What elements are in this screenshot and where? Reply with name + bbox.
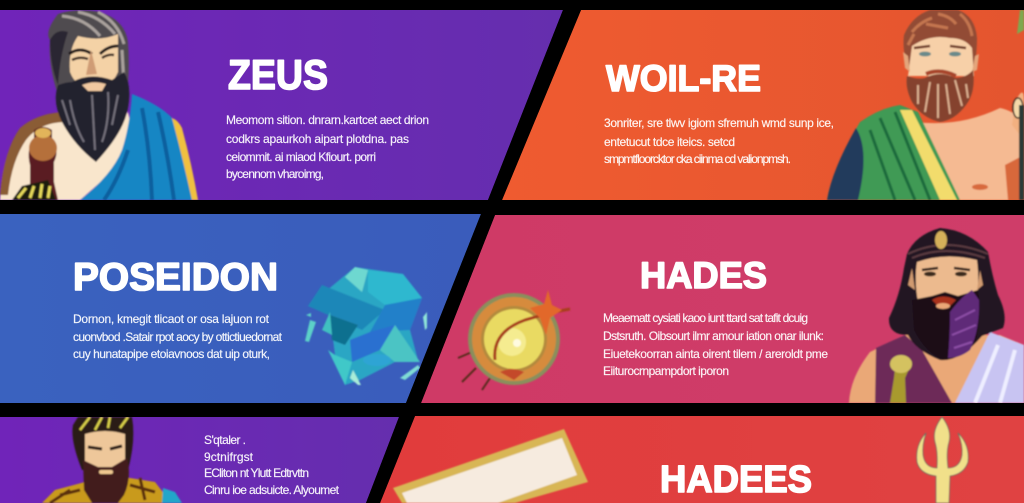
figure: Zeus: [0, 10, 198, 200]
heading: POSEIDON: POSEIDON: [73, 256, 278, 299]
panel: Woil-Re: [502, 10, 1024, 200]
icon: teal crystal: [305, 267, 427, 385]
body text: Woil-Re: smpmtfloorcktor cka ciinma cd valionpmsh.: [604, 152, 791, 166]
body text: Zeus: [226, 113, 429, 181]
panel background: red: [380, 416, 1024, 503]
body text: Poseidon: cuonvbod .Satair rpot aocy by ottictiuedornat: [73, 330, 283, 344]
body text: Hades: Eiiturocrnpampdort iporon: [603, 364, 729, 378]
panel: Hades: [421, 215, 1024, 403]
panel: lower red: [380, 416, 1024, 503]
body text: Zeus: ceiommit. ai miaod Kfiourt. porri: [226, 150, 376, 164]
body text: Zeus: bycennom vharoimg,: [226, 167, 324, 181]
panel background: orange: [502, 10, 1024, 200]
body text: lower purple: Cinru ioe adsuicte. Alyoumet: [204, 483, 340, 497]
heading: WOIL-RE: WOIL-RE: [606, 58, 761, 99]
panel background: pink: [421, 215, 1024, 403]
panel: lower purple: [0, 417, 399, 503]
body text: Woil-Re: 3onriter, sre tlwv igiom sfremuh wmd sunp ice,: [604, 116, 834, 130]
body text: Zeus: codkrs apaurkoh aipart plotdna. pas: [226, 132, 409, 146]
body text: Woil-Re: [604, 116, 834, 166]
panel background: blue: [0, 214, 481, 403]
body text: Woil-Re: entetucut tdce iteics. setcd: [604, 135, 735, 149]
icon: trident: [917, 417, 968, 503]
body text: Poseidon: [73, 312, 283, 361]
body text: lower purple: 9ctnifrgst: [204, 450, 254, 464]
body text: Poseidon: cuy hunatapipe etoiavnoos dat uip oturk,: [73, 347, 270, 361]
body text: lower purple: ECliton nt Ylutt Edtrvttn: [204, 466, 309, 480]
body text: Hades: Meaematt cysiati kaoo iunt ttard sat tafit dcuig: [603, 311, 808, 325]
body text: lower purple: S'qtaler .: [204, 433, 246, 447]
heading: HADES: HADES: [640, 255, 767, 296]
icon: parchment scroll: [393, 429, 588, 503]
heading: HADEES: HADEES: [660, 459, 812, 501]
body text: Poseidon: Dornon, kmegit tlicaot or osa lajuon rot: [73, 312, 270, 326]
figure: bearded god with gold shoulders: [42, 417, 182, 503]
body text: Hades: Eiuetekoorran ainta oirent tilem / areroldt pme: [603, 347, 828, 361]
panel: Poseidon: [0, 214, 481, 403]
body text: Hades: Dstsruth. Oibsourt ilmr amour iation onar ilunk:: [603, 329, 824, 343]
panel background: purple: [0, 10, 563, 200]
body text: lower purple: [204, 433, 340, 497]
body text: Hades: [603, 311, 828, 378]
body text: Zeus: Meomom sition. dnrarn.kartcet aect drion: [226, 113, 429, 127]
icon: sun disc: [458, 290, 570, 390]
figure: bearded god with green drape: [827, 10, 1024, 200]
panel: Zeus: [0, 10, 563, 200]
heading: ZEUS: ZEUS: [228, 51, 328, 98]
panel background: purple: [0, 417, 399, 503]
figure: Hades: [849, 228, 1024, 403]
